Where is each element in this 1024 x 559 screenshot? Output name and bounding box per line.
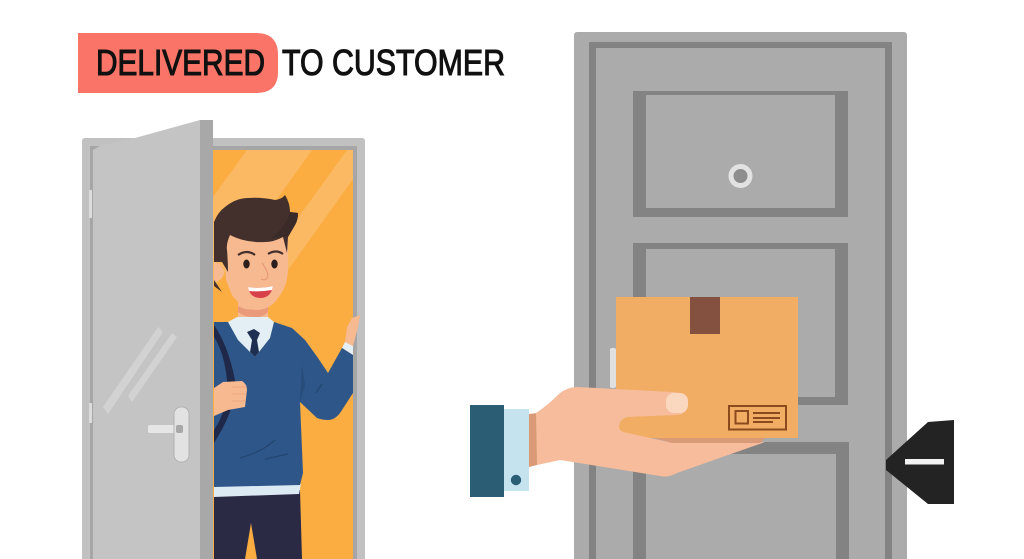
- shirt collar: [228, 317, 274, 357]
- doorway: [90, 146, 357, 559]
- glass reflection: [103, 327, 177, 414]
- sweater: [214, 322, 353, 487]
- orange interior: [205, 150, 353, 559]
- backpack strap: [214, 325, 235, 443]
- backplate: [174, 407, 189, 462]
- shipping label: [729, 406, 786, 430]
- sleeve shadow: [300, 365, 305, 402]
- sweater creases: [240, 384, 322, 459]
- illustration: open door with customer: [82, 120, 365, 559]
- sideburn tip: [214, 280, 222, 292]
- spindle: [176, 425, 183, 433]
- top panel: [633, 91, 848, 217]
- hair: [214, 195, 298, 272]
- door latch sliver: [610, 348, 616, 388]
- door outer groove: [589, 42, 892, 559]
- cuff button: [511, 475, 521, 485]
- title highlight badge: [78, 33, 278, 93]
- arrow body: [886, 420, 954, 504]
- hair shade: [272, 212, 298, 238]
- necktie: [247, 329, 260, 357]
- head: [224, 232, 288, 310]
- middle panel: [633, 243, 848, 405]
- ear: [214, 262, 224, 282]
- customer: [214, 195, 360, 559]
- peephole: [731, 166, 750, 186]
- shirt cuff: [504, 409, 529, 491]
- open door leaf: [93, 120, 200, 559]
- eyes: [243, 260, 250, 268]
- title word: delivered: DELIVERED: [96, 42, 265, 83]
- lower panel: [633, 442, 849, 559]
- raised arm cuff: [342, 342, 353, 355]
- title: [78, 33, 505, 93]
- interior light streaks: [213, 150, 353, 289]
- door frame: [82, 138, 365, 559]
- arrow minus mark: [905, 459, 944, 464]
- parcel box: [616, 297, 798, 438]
- nose: [261, 263, 268, 280]
- lever: [148, 425, 180, 433]
- door handle: [148, 407, 189, 462]
- fingernail: [666, 393, 688, 413]
- wrist: [529, 413, 537, 467]
- teeth: [248, 286, 273, 291]
- black arrow tab: [886, 420, 954, 504]
- title words: to customer: TO CUSTOMER: [282, 42, 505, 83]
- mouth: [248, 286, 273, 298]
- delivery hand: [470, 387, 765, 497]
- hand: [536, 387, 765, 477]
- palm shadow: [653, 438, 765, 443]
- neck shadow: [238, 304, 268, 317]
- trousers: [214, 490, 302, 559]
- hinges: [89, 190, 92, 423]
- sweater hem: [214, 484, 301, 497]
- parcel: [616, 297, 798, 438]
- jacket sleeve: [470, 405, 504, 497]
- door leaf edge: [200, 120, 213, 559]
- neck: [238, 296, 268, 322]
- door slab: [574, 32, 907, 559]
- eyebrows: [238, 252, 283, 255]
- raised arm hand: [345, 315, 360, 346]
- holding hand: [214, 381, 247, 416]
- illustration: front door: [574, 32, 907, 559]
- finger lines: [232, 387, 246, 401]
- parcel tape: [690, 297, 720, 334]
